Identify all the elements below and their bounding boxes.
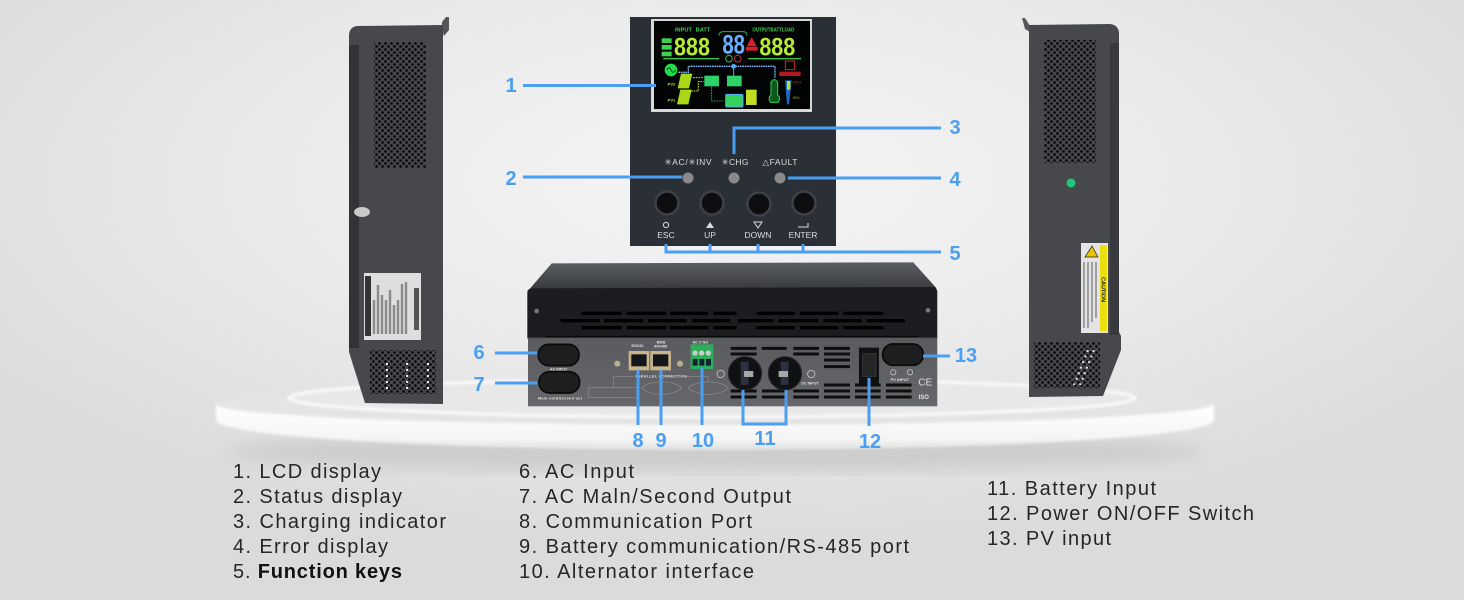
button labels	[657, 222, 817, 240]
indicator labels: ✳AC/✳INV	[664, 157, 712, 167]
parallel connection outlines	[588, 377, 728, 398]
LCD display: 25%	[793, 96, 799, 100]
panel markings: DC INPUT	[801, 382, 819, 386]
panel markings: CE	[918, 378, 932, 389]
callout numbers: 1	[505, 75, 517, 97]
feature list: column 1: 2. Status display	[233, 486, 402, 508]
rear view of inverter	[527, 262, 937, 406]
callout numbers	[473, 75, 977, 453]
callout numbers: 5	[949, 243, 961, 265]
feature list: column 2: 9. Battery communication/RS-485 port	[519, 536, 909, 558]
feature list: column 1: 4. Error display	[233, 536, 388, 558]
feature list: column 2	[519, 461, 909, 583]
callout numbers: 2	[505, 168, 517, 190]
caution label	[1081, 243, 1108, 333]
panel markings: PV INPUT	[891, 377, 910, 382]
LCD display: 88	[722, 30, 745, 60]
panel markings	[538, 339, 932, 401]
callout numbers: 8	[632, 430, 644, 452]
button labels: DOWN	[745, 230, 771, 240]
LCD display: 888	[674, 34, 710, 62]
LCD display: INPUT	[675, 28, 693, 34]
green terminal block	[691, 344, 713, 369]
panel markings: RS232	[631, 343, 644, 348]
battery connectors	[728, 357, 802, 390]
callout numbers: 7	[473, 374, 485, 396]
panel markings: ISO	[919, 395, 929, 401]
LCD display: BATT	[696, 28, 711, 34]
LCD display: PV1	[668, 98, 676, 103]
callout numbers: 9	[655, 430, 667, 452]
RJ45 ports	[614, 351, 683, 370]
indicator LEDs	[682, 172, 786, 184]
LCD display: OUTPUTBATTLOAD	[752, 28, 794, 34]
left side view of inverter	[349, 17, 449, 404]
panel markings: AC INPUT	[550, 368, 568, 372]
panel markings: /RS485	[654, 344, 668, 349]
callout numbers: 4	[949, 169, 961, 191]
LCD display: 888	[759, 34, 795, 62]
white display platform	[216, 379, 1214, 472]
panel vents	[731, 348, 912, 397]
indicator labels: △FAULT	[762, 157, 798, 167]
feature list: column 1: 1. LCD display	[233, 461, 381, 483]
right side view of inverter	[1022, 18, 1121, 397]
power switch	[859, 348, 879, 385]
callout numbers: 12	[859, 431, 881, 453]
feature list: column 3	[987, 478, 1254, 550]
function buttons	[656, 192, 816, 216]
top cover	[527, 262, 937, 292]
indicator labels	[664, 157, 798, 167]
panel markings: PARALLEL CONNECTION	[635, 375, 687, 379]
feature list: column 3: 13. PV input	[987, 528, 1111, 550]
dark front with vents	[527, 287, 937, 338]
callout numbers: 11	[754, 428, 776, 450]
feature list: column 2: 7. AC Maln/Second Output	[519, 486, 791, 508]
feature list: column 3: 11. Battery Input	[987, 478, 1156, 500]
front control panel	[630, 17, 836, 246]
feature list: column 3: 12. Power ON/OFF Switch	[987, 503, 1254, 525]
indicator labels: ✳CHG	[722, 157, 748, 167]
feature list: column 1: 3. Charging indicator	[233, 511, 446, 533]
callout lines	[495, 86, 950, 426]
feature list: column 2: 6. AC Input	[519, 461, 634, 483]
feature list: column 1	[233, 461, 446, 583]
rear connection panel	[528, 337, 937, 406]
panel markings: Main out&Second out	[538, 396, 583, 400]
callout numbers: 6	[473, 342, 485, 364]
AC terminals	[538, 344, 923, 393]
button labels: ENTER	[789, 230, 817, 240]
panel markings: NC C NO	[693, 340, 708, 344]
caution label: CAUTION	[1100, 277, 1106, 302]
feature list: column 1: 5. Function keys	[233, 561, 402, 583]
callout numbers: 3	[949, 117, 961, 139]
feature list: column 2: 10. Alternator interface	[519, 561, 754, 583]
callout numbers: 13	[955, 345, 977, 367]
rating label	[364, 273, 421, 340]
feature list: column 2: 8. Communication Port	[519, 511, 752, 533]
LCD display	[651, 19, 812, 112]
callout numbers: 10	[692, 430, 714, 452]
panel markings: BMS	[657, 339, 666, 344]
LCD display: PV2	[668, 82, 676, 87]
button labels: UP	[704, 230, 716, 240]
button labels: ESC	[657, 230, 675, 240]
LCD display: 100%	[793, 80, 801, 84]
